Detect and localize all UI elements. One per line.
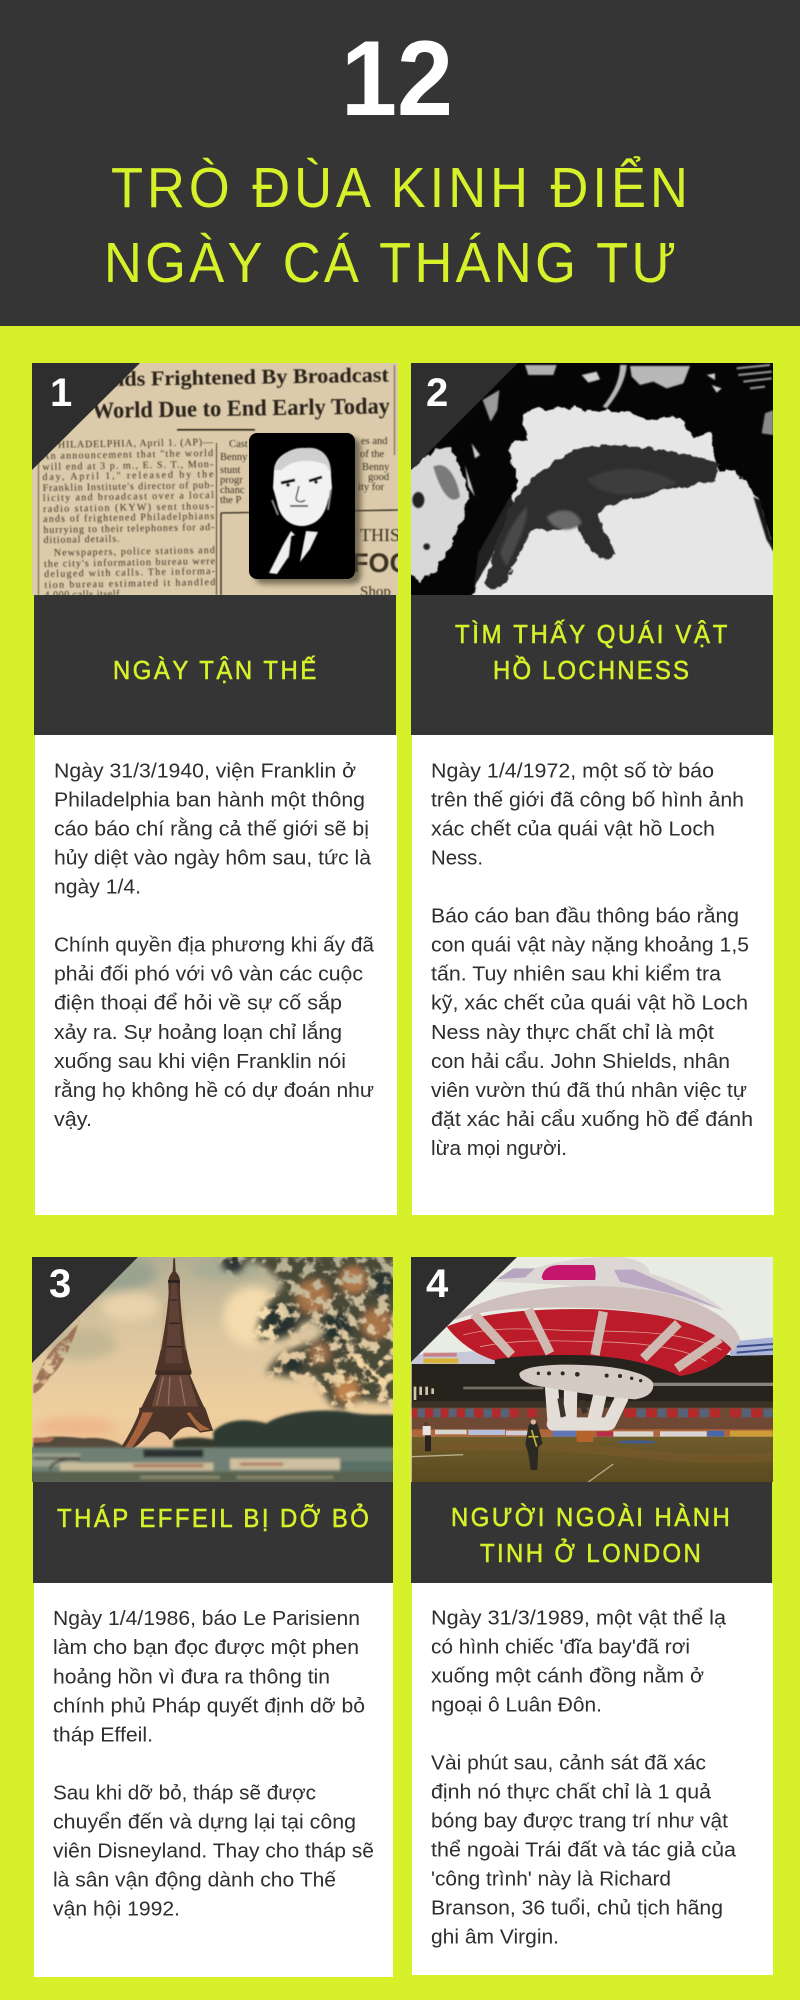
card body 2: trên thế giới đã công bố hình ảnh bbox=[431, 789, 744, 811]
card body 4: thể ngoài Trái đất và tác giả của bbox=[431, 1840, 737, 1862]
card body 3: viên Disneyland. Thay cho tháp sẽ bbox=[53, 1840, 374, 1862]
panel: card 4 bbox=[411, 1257, 773, 1975]
photo: newspaper clipping: HILADELPHIA, April 1. (AP)— bbox=[58, 437, 214, 451]
card body 1: ngày 1/4. bbox=[54, 877, 141, 899]
UFO red underside bbox=[447, 1309, 734, 1376]
card body 3: Sau khi dỡ bỏ, tháp sẽ được bbox=[53, 1782, 316, 1804]
card body 1: vậy. bbox=[54, 1109, 92, 1131]
photo: newspaper clipping: hurrying to their telephones for ad- bbox=[43, 522, 215, 536]
photo: newspaper clipping: nds Frightened By Broadcast bbox=[112, 363, 389, 391]
card body 1: Ngày 31/3/1940, viện Franklin ở bbox=[54, 760, 356, 782]
card body 4: ngoại ô Luân Đôn. bbox=[431, 1695, 602, 1717]
card body 1: Philadelphia ban hành một thông bbox=[54, 789, 365, 811]
card body 4: xuống một cánh đồng nằm ở bbox=[431, 1665, 704, 1688]
photo: newspaper clipping: FOC bbox=[352, 548, 409, 578]
photo: newspaper clipping: the city's information bureau were bbox=[44, 556, 216, 570]
number badge 3 bbox=[32, 1257, 138, 1363]
number badge 2 bbox=[411, 363, 518, 470]
card heading 3 bbox=[33, 1482, 393, 1583]
card body 1: cáo báo chí rằng cả thế giới sẽ bị bbox=[54, 818, 369, 841]
card body 2: tấn. Tuy nhiên sau khi kiểm tra bbox=[431, 964, 722, 986]
photo: newspaper clipping: ditional details. bbox=[44, 534, 120, 546]
card body 4 bbox=[412, 1583, 773, 1975]
card body 4: ghi âm Virgin. bbox=[431, 1927, 559, 1949]
card body 3: chính phủ Pháp quyết định dỡ bỏ bbox=[53, 1695, 365, 1717]
photo: newspaper clipping: tion bureau estimated it handled bbox=[44, 577, 215, 591]
photo: newspaper clipping: World Due to End Early Today bbox=[92, 393, 391, 423]
river and boats bbox=[30, 1447, 397, 1484]
card body 2: con quái vật này nặng khoảng 1,5 bbox=[431, 935, 749, 957]
number badge 4 bbox=[411, 1257, 517, 1362]
photo: newspaper clipping: will end at 3 p. m., E. S. T., Mon- bbox=[42, 459, 213, 473]
tree line bbox=[173, 1410, 395, 1453]
card body 2: xác chết của quái vật hồ Loch bbox=[431, 819, 715, 841]
photo: newspaper clipping bbox=[32, 363, 409, 601]
UFO top dome bbox=[493, 1257, 724, 1311]
photo: newspaper clipping: of the bbox=[360, 449, 385, 460]
people on pitch bbox=[423, 1419, 543, 1470]
card body 2: Ness này thực chất chỉ là một bbox=[431, 1022, 714, 1044]
UFO rim bbox=[455, 1286, 740, 1352]
photo: newspaper clipping: es and bbox=[361, 436, 388, 447]
photo: newspaper clipping: stunt bbox=[220, 465, 241, 476]
card body 3: Ngày 1/4/1986, báo Le Parisienn bbox=[53, 1608, 360, 1630]
panel: card 2 bbox=[408, 363, 777, 1215]
card body 3: làm cho bạn đọc được một phen bbox=[53, 1637, 359, 1659]
card heading 2: HỒ LOCHNESS bbox=[493, 654, 689, 685]
number badge 3: 3 bbox=[49, 1262, 71, 1306]
card body 1: rằng họ không hề có dự đoán như bbox=[54, 1079, 374, 1102]
number badge 2: 2 bbox=[426, 371, 448, 415]
photo: newspaper clipping: ands of frightened Philadelphians bbox=[43, 511, 214, 525]
panel: card 3 bbox=[30, 1250, 397, 1977]
card body 3: tháp Effeil. bbox=[53, 1724, 153, 1746]
card heading 4: TINH Ở LONDON bbox=[480, 1537, 701, 1568]
card body 1: xảy ra. Sự hoảng loạn chỉ lắng bbox=[54, 1021, 342, 1044]
photo: newspaper clipping: Benny bbox=[362, 462, 390, 473]
photo: newspaper clipping: day, April 1," released by the bbox=[42, 469, 214, 483]
photo: newspaper clipping: An announcement that "the world bbox=[42, 448, 213, 462]
photo: newspaper clipping: Cast bbox=[229, 439, 248, 450]
card body 1: phải đối phó với vô vàn các cuộc bbox=[54, 964, 363, 986]
card heading 4: NGƯỜI NGOÀI HÀNH bbox=[451, 1502, 730, 1532]
card heading 1 bbox=[34, 595, 396, 735]
photo: Eiffel tower bbox=[30, 1250, 397, 1484]
photo: newspaper clipping: deluged with calls. The informa- bbox=[44, 566, 215, 580]
tower bbox=[120, 1258, 213, 1449]
card heading 2 bbox=[411, 595, 773, 735]
card body 1: xuống sau khi viện Franklin nói bbox=[54, 1051, 346, 1073]
panel: card 1 bbox=[32, 363, 409, 1215]
card body 2: Báo cáo ban đầu thông báo rằng bbox=[431, 905, 739, 928]
foliage bbox=[218, 1257, 393, 1412]
photo: newspaper clipping: Benny bbox=[220, 452, 248, 463]
photo: newspaper clipping: progr bbox=[220, 475, 243, 486]
card body 1 bbox=[35, 735, 397, 1215]
portrait bbox=[249, 433, 361, 584]
card body 3: là sân vận động dành cho Thế bbox=[53, 1870, 336, 1892]
card body 2: Ngày 1/4/1972, một số tờ báo bbox=[431, 760, 714, 782]
big number 12: 12 bbox=[341, 18, 453, 138]
card body 4: Branson, 36 tuổi, chủ tịch hãng bbox=[431, 1898, 723, 1920]
card body 3: hoảng hồn vì đưa ra thông tin bbox=[53, 1666, 330, 1688]
photo: newspaper clipping: THIS bbox=[360, 525, 400, 545]
photo: newspaper clipping: ity for bbox=[358, 482, 384, 493]
card body 4: Vài phút sau, cảnh sát đã xác bbox=[431, 1753, 706, 1775]
number badge 4: 4 bbox=[426, 1262, 449, 1306]
card body 2: viên vườn thú đã thú nhân việc tự bbox=[431, 1080, 747, 1102]
card body 4: bóng bay được trang trí như vật bbox=[431, 1811, 728, 1833]
card heading 1: NGÀY TẬN THẾ bbox=[113, 655, 316, 685]
card heading 3: THÁP EFFEIL BỊ DỠ BỎ bbox=[57, 1502, 369, 1533]
header panel bbox=[0, 0, 800, 326]
title line 1: TRÒ ĐÙA KINH ĐIỂN bbox=[111, 155, 688, 219]
UFO lower body bbox=[519, 1365, 653, 1442]
card body 1: hủy diệt vào ngày hôm sau, tức là bbox=[54, 848, 372, 870]
photo: Loch Ness carcass bbox=[408, 363, 777, 603]
stadium bbox=[412, 1337, 773, 1482]
card body 1: điện thoại để hỏi về sự cố sắp bbox=[54, 992, 342, 1015]
card body 4: Ngày 31/3/1989, một vật thể lạ bbox=[431, 1607, 727, 1629]
photo: newspaper clipping: the P bbox=[220, 495, 241, 506]
card body 3: chuyển đến và dựng lại tại công bbox=[53, 1811, 356, 1833]
card body 3: vận hội 1992. bbox=[53, 1899, 180, 1921]
photo: newspaper clipping: chanc bbox=[220, 485, 245, 496]
photo: newspaper clipping: 4,000 calls itself. bbox=[44, 589, 123, 601]
number badge 1: 1 bbox=[50, 371, 72, 415]
photo: newspaper clipping: Newspapers, police stations and bbox=[54, 545, 215, 559]
card heading 2: TÌM THẤY QUÁI VẬT bbox=[455, 619, 727, 649]
photo: newspaper clipping: good bbox=[368, 472, 390, 483]
card body 4: 'công trình' này là Richard bbox=[431, 1869, 671, 1891]
photo: newspaper clipping: licity and broadcast over a local bbox=[43, 490, 214, 504]
title line 2: NGÀY CÁ THÁNG TƯ bbox=[104, 230, 676, 294]
card body 2: lừa mọi người. bbox=[431, 1138, 567, 1160]
card body 2 bbox=[412, 735, 774, 1215]
card body 2: con hải cẩu. John Shields, nhân bbox=[431, 1051, 730, 1073]
distant trees left bbox=[32, 1436, 126, 1450]
photo: newspaper clipping: radio station (KYW) sent thous- bbox=[43, 501, 214, 515]
card heading 4 bbox=[411, 1482, 772, 1583]
card body 3 bbox=[34, 1583, 393, 1977]
card body 2: kỹ, xác chết của quái vật hồ Loch bbox=[431, 993, 748, 1015]
card body 2: đặt xác hải cẩu xuống hồ để đánh bbox=[431, 1109, 753, 1131]
card body 4: có hình chiếc 'đĩa bay'đã rơi bbox=[431, 1636, 690, 1658]
number badge 1 bbox=[32, 363, 140, 470]
card body 1: Chính quyền địa phương khi ấy đã bbox=[54, 935, 375, 957]
photo: newspaper clipping: Franklin Institute's director of pub- bbox=[43, 480, 214, 494]
card body 4: định nó thực chất chỉ là 1 quả bbox=[431, 1782, 712, 1804]
photo: newspaper clipping: Shop bbox=[360, 584, 391, 600]
card body 2: Ness. bbox=[431, 848, 483, 870]
photo: UFO balloon in stadium bbox=[411, 1257, 773, 1482]
